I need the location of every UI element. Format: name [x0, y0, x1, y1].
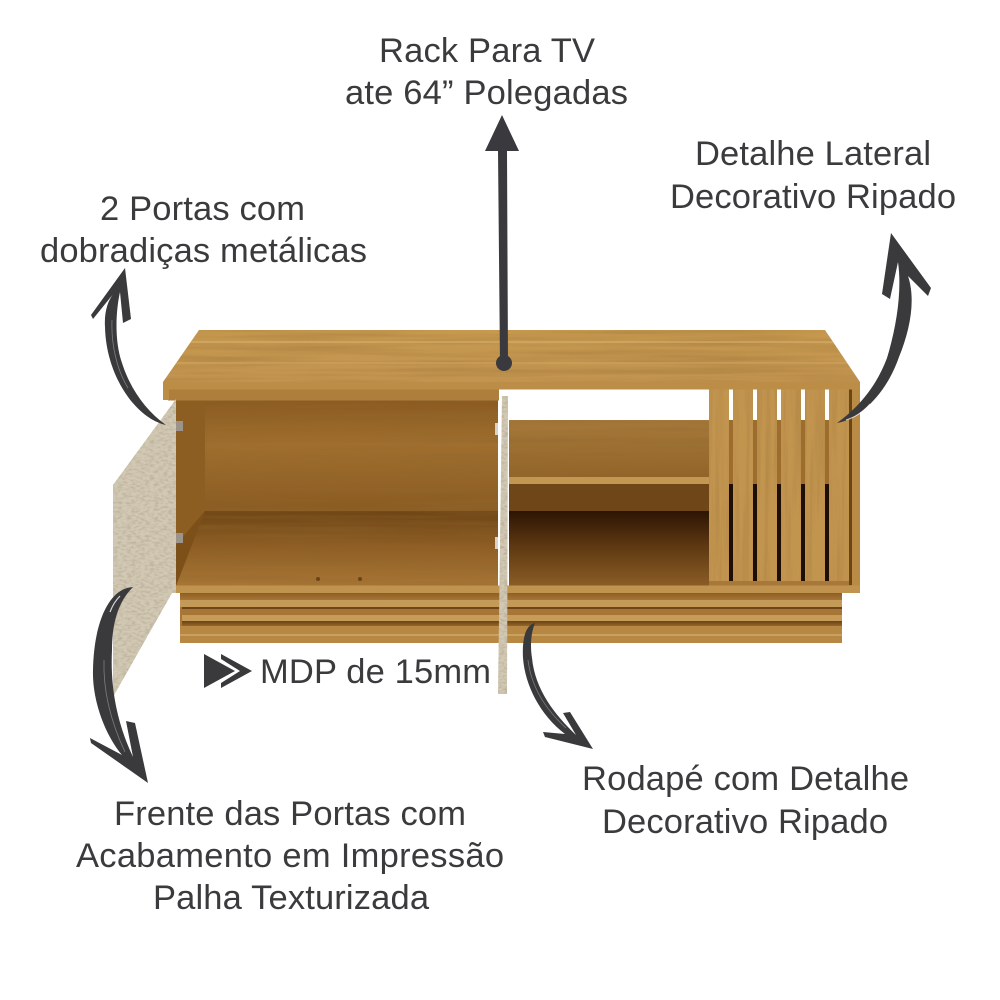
- label: door front finish: Acabamento em Impressão: [76, 837, 504, 875]
- closed door edge with straw texture: [498, 396, 508, 694]
- label: plinth: Rodapé com Detalhe: [582, 760, 909, 798]
- arrow: plinth: [523, 623, 593, 749]
- label: door front finish: Palha Texturizada: [153, 879, 430, 917]
- label: doors and hinges: dobradiças metálicas: [40, 232, 367, 270]
- arrow: doors and hinges: [91, 268, 166, 425]
- icon: double arrow: [204, 654, 252, 688]
- open door with straw texture: [113, 399, 176, 697]
- carcass edges: [163, 382, 860, 593]
- label: door front finish: [76, 795, 504, 917]
- label: side detail: Detalhe Lateral: [695, 135, 931, 173]
- label: material thickness: MDP de 15mm: [260, 653, 491, 691]
- right compartment with shelf: [509, 420, 709, 586]
- tv rack furniture: [113, 330, 860, 697]
- title: ate 64” Polegadas: [345, 74, 628, 112]
- label: plinth: Decorativo Ripado: [602, 803, 888, 841]
- arrow: straight up from table top: [485, 115, 519, 371]
- table top: [163, 330, 860, 382]
- label: doors and hinges: 2 Portas com: [100, 190, 305, 228]
- arrow: side detail: [837, 233, 931, 423]
- label: side detail: [670, 135, 956, 216]
- slatted side panel: [709, 389, 860, 592]
- plinth with decorative slats: [180, 593, 842, 643]
- title: [345, 32, 628, 112]
- title: Rack Para TV: [379, 32, 595, 70]
- label: plinth: [582, 760, 909, 841]
- label: side detail: Decorativo Ripado: [670, 178, 956, 216]
- left compartment interior: [176, 400, 498, 586]
- arrow: door front finish: [90, 587, 148, 783]
- label: door front finish: Frente das Portas com: [114, 795, 466, 833]
- hinges: [173, 420, 498, 562]
- label: doors and hinges: [40, 190, 367, 270]
